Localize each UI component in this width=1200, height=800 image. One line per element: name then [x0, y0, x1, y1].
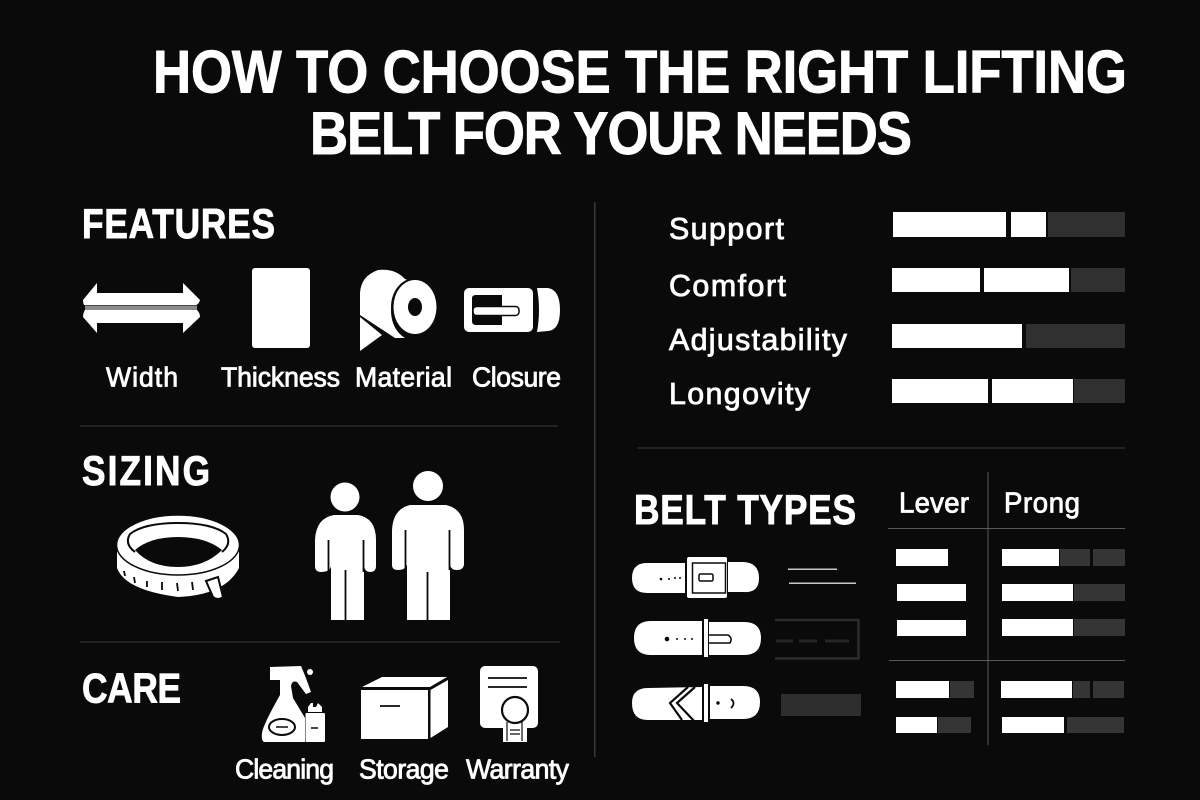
icon: width arrows [83, 283, 200, 333]
panel: care [82, 666, 569, 785]
labels: features: Thickness [221, 361, 340, 393]
row 4 [896, 681, 1124, 698]
belt 3 spec box [781, 694, 861, 716]
labels: features: Width [106, 361, 178, 393]
icon: warranty certificate [480, 666, 538, 742]
icon: material roll [360, 270, 439, 351]
row 1 [896, 549, 1125, 566]
heading: sizing: SIZING [82, 448, 210, 495]
heading: belt types: BELT TYPES [634, 487, 856, 534]
rating: adjustability [669, 322, 1125, 357]
title: BELT FOR YOUR NEEDS [310, 100, 912, 167]
belt 1 spec lines [788, 568, 856, 584]
row 3 [897, 619, 1125, 636]
rating: longovity: Longovity [669, 376, 811, 411]
table headers: Lever [899, 486, 969, 519]
title [153, 38, 1127, 167]
icon: thickness [252, 268, 310, 348]
icon: lever belt [632, 557, 759, 598]
rating: comfort [669, 268, 1125, 303]
labels: features: Closure [472, 361, 561, 393]
heading: care: CARE [82, 666, 181, 712]
labels: features [106, 361, 561, 393]
labels: care [235, 753, 569, 785]
panel: rating bars [669, 211, 1125, 411]
icon: chevron belt [632, 684, 760, 722]
labels: care: Cleaning [235, 753, 334, 785]
table grid [888, 472, 1125, 745]
title: HOW TO CHOOSE THE RIGHT LIFTING [153, 38, 1127, 105]
icon: measuring tape [116, 515, 240, 599]
rating: adjustability: Adjustability [669, 322, 848, 357]
icon: larger person [392, 471, 464, 620]
panel: sizing [82, 448, 464, 620]
icon: smaller person [315, 482, 376, 620]
dividers [80, 202, 1125, 757]
table headers: Prong [1004, 486, 1080, 519]
table headers [899, 486, 1080, 519]
icon: two people [315, 471, 464, 620]
icon: cleaning spray [262, 666, 325, 742]
row 5 [896, 717, 1124, 733]
icon: closure [464, 288, 560, 332]
labels: care: Storage [359, 753, 449, 785]
rating: support [669, 211, 1125, 246]
comparison table [888, 472, 1125, 745]
row 2 [897, 584, 1125, 601]
rating: support: Support [669, 211, 784, 246]
labels: features: Material [355, 361, 452, 393]
labels: care: Warranty [466, 753, 569, 785]
icon: prong belt [634, 619, 761, 657]
belt 2 spec box [775, 620, 858, 658]
rating: comfort: Comfort [669, 268, 786, 303]
rating: longovity [669, 376, 1125, 411]
icon: storage box [361, 677, 448, 739]
heading: features: FEATURES [82, 201, 275, 248]
panel: belt types [632, 472, 1125, 745]
panel: features [82, 201, 561, 393]
